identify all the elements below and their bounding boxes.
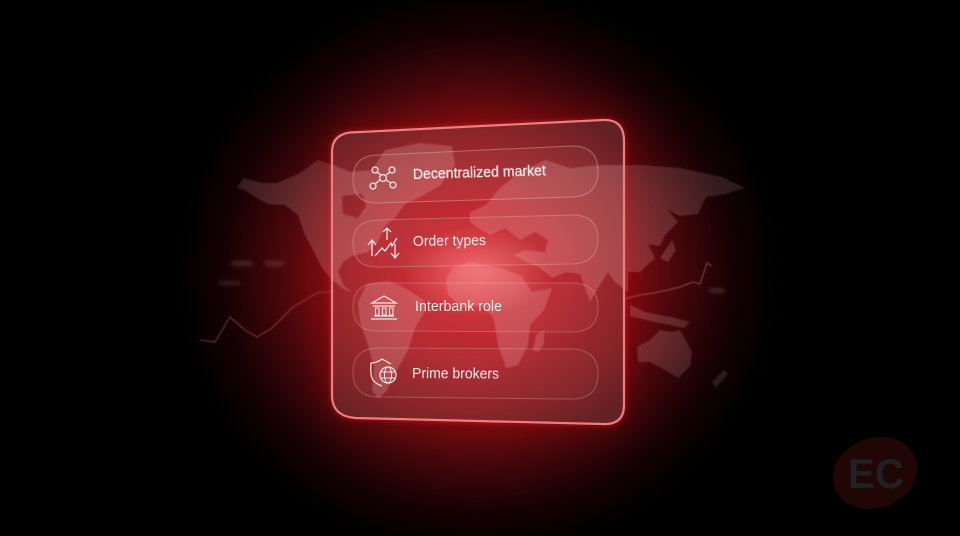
row: Order types — [353, 215, 598, 267]
label: Decentralized market — [413, 163, 546, 183]
row: Decentralized market — [353, 146, 598, 203]
map seen through the glass — [333, 142, 623, 398]
icon: order arrows — [368, 228, 399, 258]
panel outer glow — [332, 120, 624, 424]
watermark logo — [823, 425, 927, 521]
row: Interbank role — [353, 283, 598, 332]
panel border — [332, 120, 624, 424]
glass panel — [330, 118, 626, 426]
row: Prime brokers — [353, 348, 598, 399]
icon: bank — [371, 296, 397, 319]
label: Interbank role — [415, 299, 502, 315]
blurred ticker marks — [218, 262, 724, 292]
right trend line — [624, 263, 712, 299]
label: Prime brokers — [412, 366, 499, 383]
icon: shield and globe — [371, 359, 396, 386]
watermark logo: EC — [848, 450, 904, 497]
world map — [237, 143, 745, 398]
icon: network nodes — [370, 167, 396, 189]
label: Order types — [413, 233, 486, 250]
left trend line — [200, 291, 334, 342]
central highlight — [403, 227, 553, 317]
